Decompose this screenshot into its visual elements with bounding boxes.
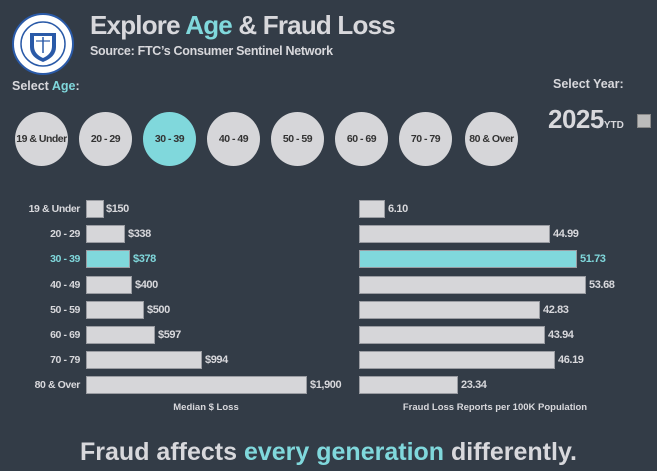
chart: median loss: $1,900 [310, 379, 341, 391]
logo: FTC seal [12, 13, 74, 75]
select year label: Select Year: [553, 77, 624, 91]
chart: median loss: $994 [205, 354, 228, 366]
age buttons: 19 & Under [16, 133, 67, 145]
chart: reports per 100K [359, 200, 615, 413]
chart: median loss: 80 & Over [35, 379, 80, 391]
chart: median loss: 19 & Under [29, 203, 80, 215]
age buttons: 80 & Over [469, 133, 514, 145]
chart: median loss: Median $ Loss [173, 402, 239, 413]
select age label: Select Age: [12, 79, 80, 93]
chart: reports per 100K: 43.94 [548, 329, 574, 341]
chart: reports per 100K: 23.34 [461, 379, 487, 391]
chart: reports per 100K: 53.68 [589, 279, 615, 291]
chart: reports per 100K: 6.10 [388, 203, 408, 215]
chart: reports per 100K: 44.99 [553, 228, 579, 240]
chart: median loss: 50 - 59 [50, 304, 80, 316]
bottom tagline: Fraud affects every generation differently. [80, 438, 577, 466]
chart: median loss: $150 [106, 203, 129, 215]
age buttons: 50 - 59 [283, 133, 312, 145]
chart: reports per 100K: 51.73 [580, 253, 606, 265]
age buttons: 60 - 69 [347, 133, 376, 145]
year selector: 2025YTD [548, 104, 624, 134]
chart: median loss: 30 - 39 [50, 253, 80, 265]
age buttons: 30 - 39 [155, 133, 184, 145]
chart: median loss: 60 - 69 [50, 329, 80, 341]
chart: reports per 100K: 42.83 [543, 304, 569, 316]
age buttons: 40 - 49 [219, 133, 248, 145]
title: Explore Age & Fraud Loss [90, 10, 395, 40]
age buttons: 70 - 79 [411, 133, 440, 145]
chart: median loss: $500 [147, 304, 170, 316]
chart: median loss: 70 - 79 [50, 354, 80, 366]
chart: median loss: 40 - 49 [50, 279, 80, 291]
chart: median loss: 20 - 29 [50, 228, 80, 240]
chart: reports per 100K: 46.19 [558, 354, 584, 366]
age buttons: 20 - 29 [91, 133, 120, 145]
chart: reports per 100K: Fraud Loss Reports per 100K Population [403, 402, 587, 413]
chart: median loss [29, 200, 342, 413]
chart: median loss: $338 [128, 228, 151, 240]
subtitle: Source: FTC’s Consumer Sentinel Network [90, 44, 333, 58]
chart: median loss: $597 [158, 329, 181, 341]
age buttons [15, 112, 518, 166]
chart: median loss: $400 [135, 279, 158, 291]
chart: median loss: $378 [133, 253, 156, 265]
